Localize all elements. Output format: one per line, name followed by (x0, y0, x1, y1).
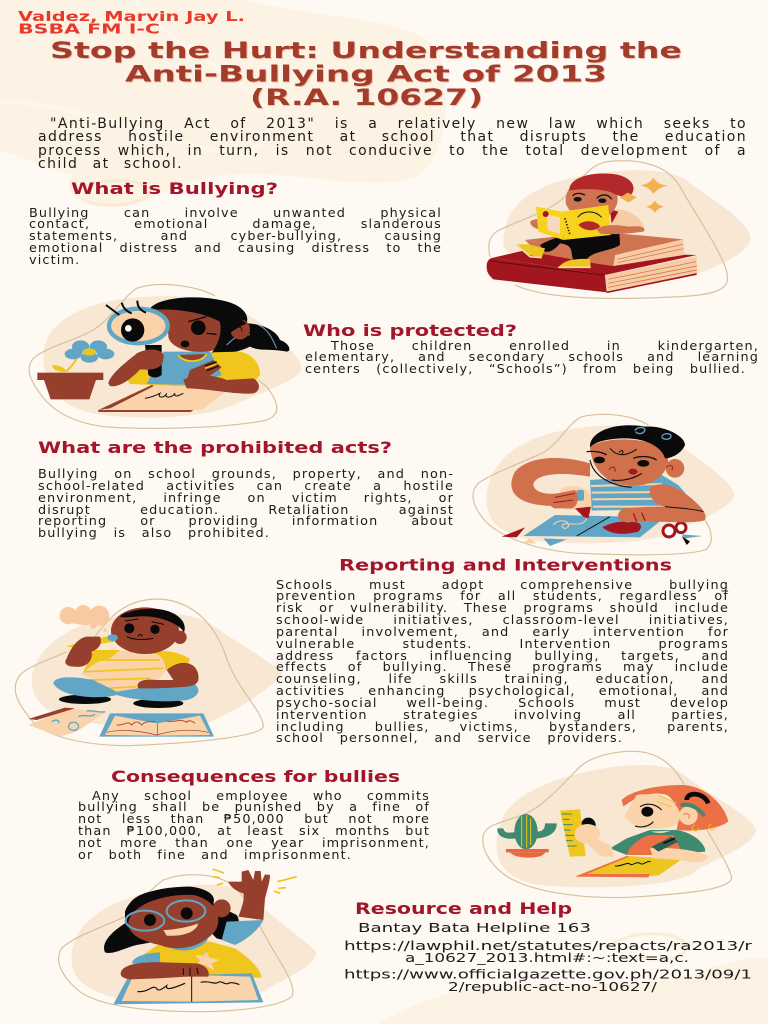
text: consequences for bullies: bullying shall be punished by a fine of (78, 800, 430, 815)
author name and class: BSBA FM I-C (18, 22, 160, 38)
intro paragraph: process which, in turn, is not conducive to the total development of a (38, 143, 747, 159)
illustration: boy sitting cross-legged with pencil (15, 599, 283, 746)
heading: Who is protected?: Who is protected? (303, 321, 517, 340)
text: who is protected (305, 338, 759, 377)
text: reporting and interventions: psycho-social well-being. Schools must develop (276, 696, 729, 711)
title: (R.A. 10627) (250, 86, 483, 111)
text: what is bullying (29, 206, 442, 268)
text: what is bullying: statements, and cyber-bullying, causing (29, 229, 442, 244)
text: prohibited acts: environment, infringe on victim rights, or (38, 491, 454, 506)
text: prohibited acts: disrupt education. Retaliation against (38, 503, 454, 518)
text: who is protected: elementary, and secondary schools and learning (305, 350, 759, 365)
text: helpline and resource links (344, 920, 753, 994)
text: reporting and interventions: parental involvement, and early intervention for (276, 625, 729, 640)
text: reporting and interventions: including bullies, victims, bystanders, parents, (276, 720, 729, 735)
text: reporting and interventions: address factors influencing bullying, targets, and (276, 649, 729, 664)
illustration: boy gluing paper (473, 414, 734, 555)
text: prohibited acts: reporting or providing information about (38, 514, 454, 529)
text: helpline and resource links: https://www.officialgazette.gov.ph/2013/09/1 (344, 966, 752, 982)
heading: Reporting and Interventions: Reporting and Interventions (339, 556, 672, 574)
text: what is bullying: Bullying can involve unwanted physical (29, 206, 442, 220)
background blob: bottom right (377, 934, 768, 1024)
intro paragraph (38, 116, 747, 172)
intro paragraph: child at school. (38, 156, 183, 172)
text: who is protected: centers (collectively, “Schools”) from being bullied. (305, 362, 746, 377)
heading: Consequences for bullies: Consequences for bullies (111, 767, 400, 786)
heading: Resource and Help: Resource and Help (355, 899, 572, 918)
title: Anti-Bullying Act of 2013 (125, 62, 607, 88)
text: reporting and interventions: counseling, life skills training, education, and (276, 672, 729, 687)
text: reporting and interventions: prevention programs for all students, regardless of (276, 589, 729, 604)
text: who is protected: Those children enrolled in kindergarten, (331, 338, 759, 354)
text: reporting and interventions: activities enhancing psychological, emotional, and (276, 684, 729, 699)
text: helpline and resource links: Bantay Bata Helpline 163 (358, 920, 591, 935)
heading: What are the prohibited acts?: What are the prohibited acts? (38, 438, 392, 457)
text: what is bullying: victim. (29, 253, 80, 268)
text: reporting and interventions: intervention strategies involving all parties, (276, 708, 729, 723)
text: reporting and interventions (276, 578, 729, 746)
text: prohibited acts: school-related activities can create a hostile (38, 479, 454, 494)
text: what is bullying: emotional distress and causing distress to the (29, 241, 442, 256)
text: reporting and interventions: school-wide initiatives, classroom-level initiatives, (276, 613, 729, 628)
text: reporting and interventions: Schools must adopt comprehensive bullying (276, 578, 729, 592)
text: reporting and interventions: effects of bullying. These programs may include (276, 660, 729, 675)
text: reporting and interventions: risk or vulnerability. These programs should include (276, 601, 729, 616)
text: consequences for bullies: not less than ₱50,000 but not more (78, 812, 430, 827)
text: consequences for bullies: not more than one year imprisonment, (78, 836, 430, 851)
illustration: girl with glasses raising hand (59, 869, 317, 1012)
illustration: girl with magnifying glass (29, 285, 302, 428)
intro paragraph: address hostile environment at school that disrupts the education (38, 129, 747, 145)
author name and class: Valdez, Marvin Jay L. (18, 10, 245, 25)
title (50, 39, 682, 111)
title: Stop the Hurt: Understanding the (50, 39, 682, 64)
illustration: child reading on stacked books (487, 161, 751, 298)
text: consequences for bullies: or both fine and imprisonment. (78, 848, 352, 863)
text: helpline and resource links: a_10627_2013.html#:~:text=a,c. (405, 950, 689, 965)
text: consequences for bullies: Any school employee who commits (92, 788, 430, 804)
illustration: girl with ruler and cactus (483, 751, 756, 898)
background blob: top left (0, 0, 446, 207)
text: consequences for bullies (78, 788, 430, 863)
text: prohibited acts: Bullying on school grounds, property, and non- (38, 467, 454, 482)
text: consequences for bullies: than ₱100,000, at least six months but (78, 824, 430, 839)
text: prohibited acts: bullying is also prohibited. (38, 526, 270, 541)
author name and class (18, 10, 245, 38)
text: prohibited acts (38, 467, 454, 541)
text: helpline and resource links: 2/republic-act-no-10627/ (448, 979, 658, 994)
text: what is bullying: contact, emotional damage, slanderous (29, 217, 442, 232)
heading: What is Bullying?: What is Bullying? (71, 179, 278, 198)
text: reporting and interventions: vulnerable students. Intervention programs (276, 637, 729, 652)
text: reporting and interventions: school personnel, and service providers. (276, 731, 623, 746)
intro paragraph: "Anti-Bullying Act of 2013" is a relatively new law which seeks to (50, 116, 747, 132)
text: helpline and resource links: https://lawphil.net/statutes/repacts/ra2013/r (344, 938, 753, 953)
